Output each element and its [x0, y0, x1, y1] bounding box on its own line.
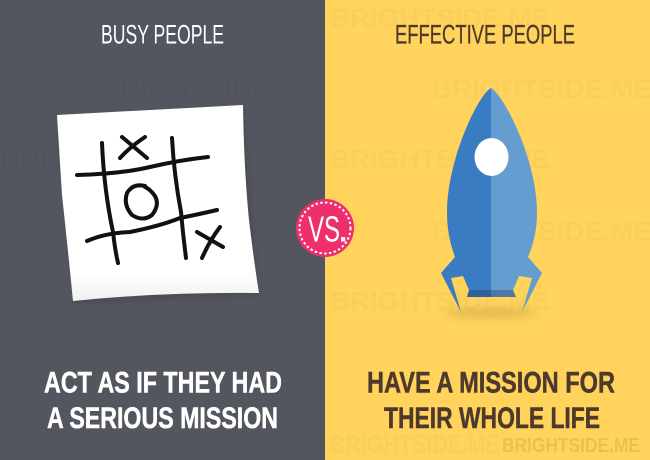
badge: VS: VS	[308, 208, 340, 250]
note paper	[57, 105, 259, 301]
panel: effective people	[325, 0, 650, 460]
mark: bottom right X	[197, 227, 223, 258]
icon: rocket	[441, 88, 542, 318]
badge: VS	[296, 199, 354, 257]
tic-tac-toe grid	[77, 137, 223, 263]
caption: busy people: ACT AS IF THEY HAD	[44, 366, 282, 400]
rocket left half	[441, 88, 491, 312]
rocket base	[467, 290, 491, 297]
note shadow	[58, 108, 259, 304]
rocket right half	[491, 88, 542, 312]
rocket shadow	[445, 308, 537, 318]
panel: busy people	[0, 0, 325, 460]
caption: busy people: A SERIOUS MISSION	[47, 402, 278, 435]
rocket window	[474, 138, 508, 176]
mark: center O	[126, 185, 157, 218]
caption: busy people	[44, 366, 282, 435]
mark: top X	[120, 137, 147, 158]
badge: VS: .	[339, 216, 347, 248]
icon: sticky note with tic-tac-toe	[57, 105, 259, 304]
caption: effective people	[367, 366, 615, 435]
heading: busy people: BUSY PEOPLE	[101, 20, 224, 50]
